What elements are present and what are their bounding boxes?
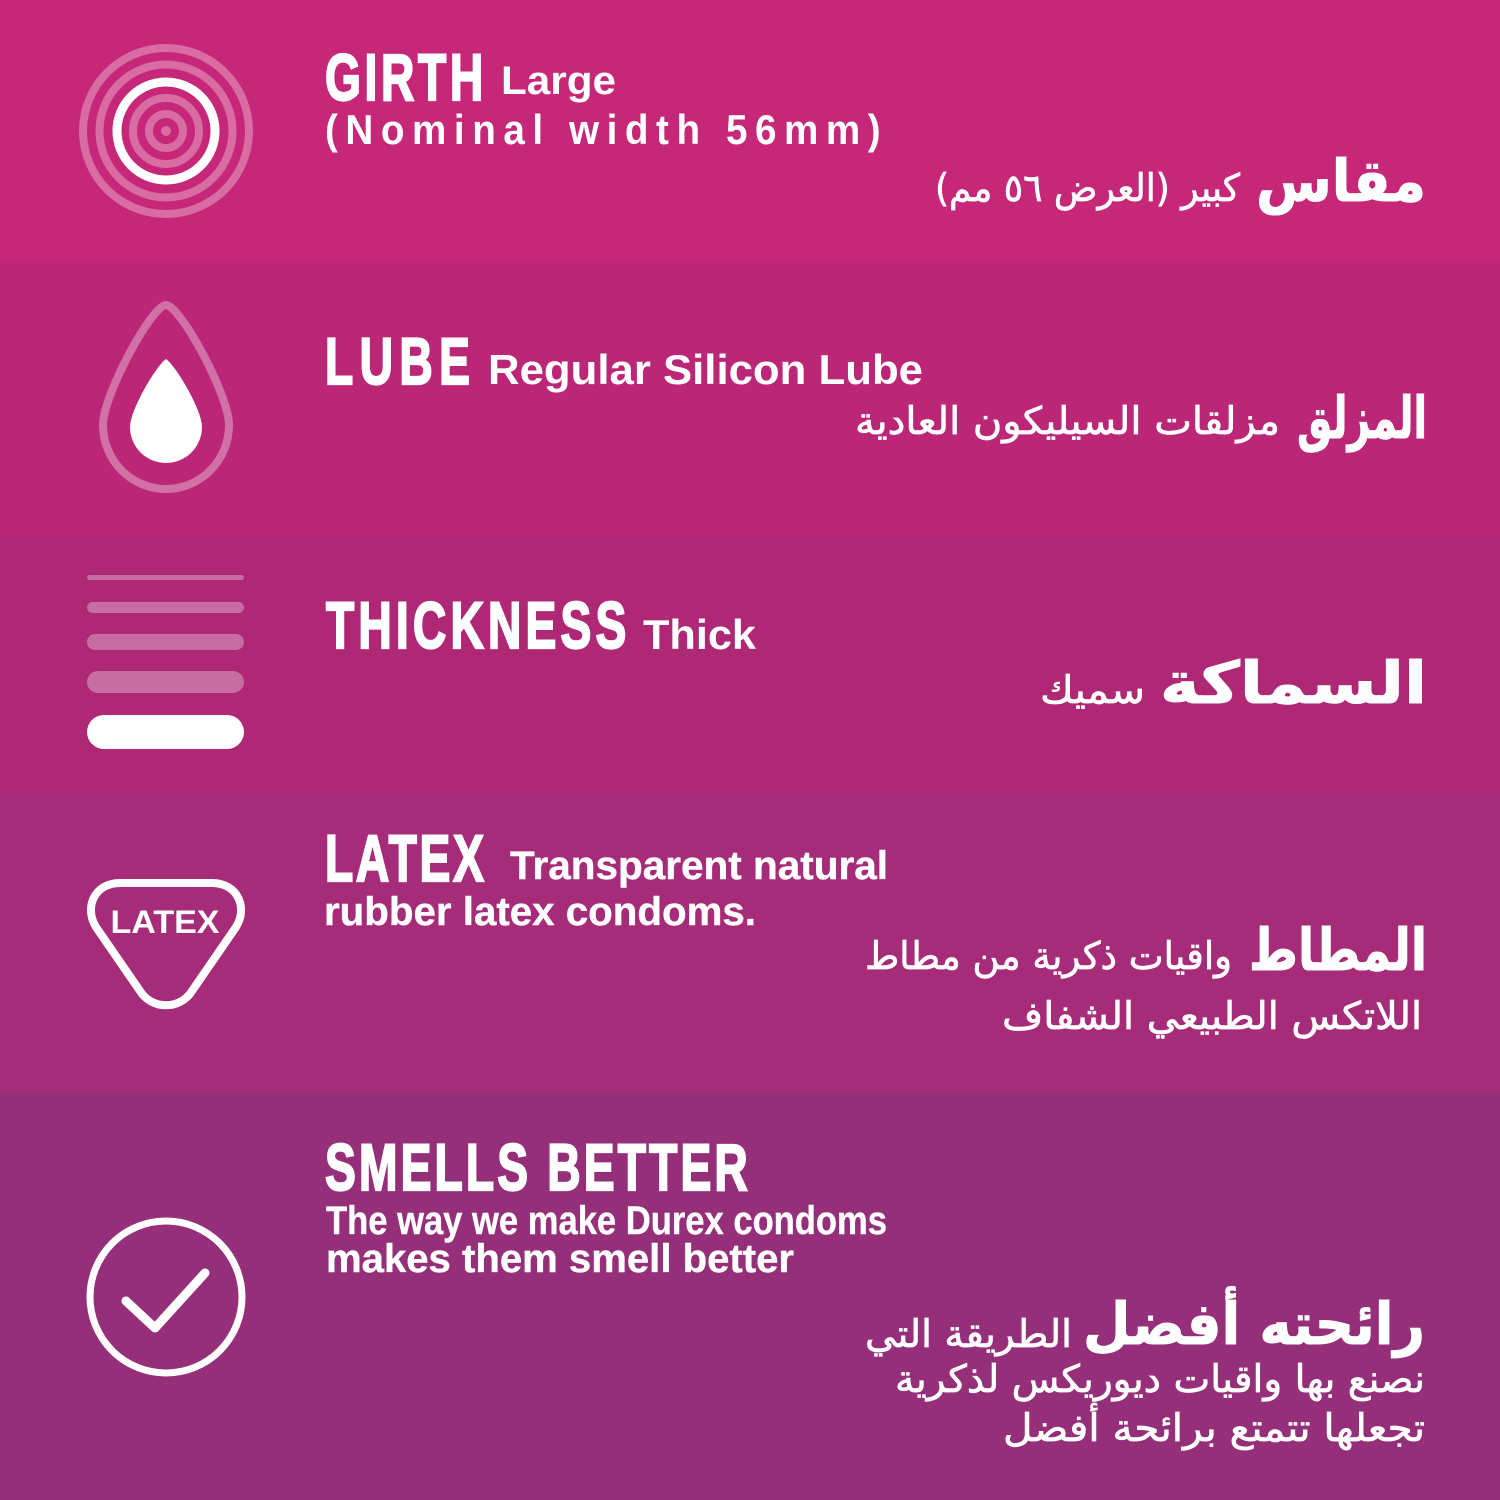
icon: thickness bars: [87, 575, 244, 749]
text: girth value: Large: [501, 59, 616, 103]
heading: girth: GIRTH: [325, 41, 483, 115]
heading: lube: LUBE: [325, 325, 470, 399]
arabic heading: lube: المزلق: [1297, 384, 1427, 453]
icon: concentric circles: [83, 48, 249, 214]
arabic heading: thickness: السماكة: [1160, 649, 1427, 717]
arabic text: smells line 3: تجعلها تتمتع برائحة أفضل: [1003, 1403, 1425, 1451]
text: thickness value: Thick: [643, 611, 757, 658]
arabic heading: latex: المطاط: [1249, 916, 1427, 984]
panel: latex: [0, 792, 1500, 1091]
panel: lube: [0, 261, 1500, 535]
text: smells better line 2: makes them smell better: [326, 1237, 794, 1281]
arabic text: latex line 1: واقيات ذكرية من مطاط: [865, 934, 1232, 979]
heading: thickness: THICKNESS: [326, 589, 626, 663]
heading: smells better: SMELLS BETTER: [325, 1131, 748, 1205]
icon: latex triangle: [91, 883, 241, 1005]
arabic text: smells line 1: الطريقة التي: [865, 1312, 1072, 1357]
arabic text: smells line 2: نصنع بها واقيات ديوريكس لذكرية: [895, 1357, 1425, 1402]
arabic text: girth: كبير (العرض ٥٦ مم): [935, 166, 1241, 211]
text: smells better line 1: The way we make Durex condoms: [326, 1199, 887, 1243]
arabic text: lube: مزلقات السيليكون العادية: [855, 399, 1280, 444]
icon: check circle: [90, 1221, 242, 1373]
panel: girth: [0, 0, 1500, 261]
arabic heading: smells better: رائحته أفضل: [1083, 1286, 1425, 1358]
text: lube value: Regular Silicon Lube: [488, 346, 923, 393]
icon: latex triangle: LATEX: [110, 904, 220, 940]
heading: latex: LATEX: [325, 822, 484, 896]
text: nominal width: (Nominal width 56mm): [325, 105, 881, 153]
arabic text: latex line 2: اللاتكس الطبيعي الشفاف: [1002, 994, 1422, 1038]
arabic heading: girth: مقاس: [1256, 147, 1426, 215]
text: latex value line 2: rubber latex condoms.: [324, 890, 756, 934]
arabic text: thickness: سميك: [1040, 668, 1145, 712]
panel: thickness: [0, 535, 1500, 792]
panel: smells better: [0, 1091, 1500, 1500]
icon: drop: [103, 305, 229, 489]
text: latex value: Transparent natural: [510, 844, 888, 888]
